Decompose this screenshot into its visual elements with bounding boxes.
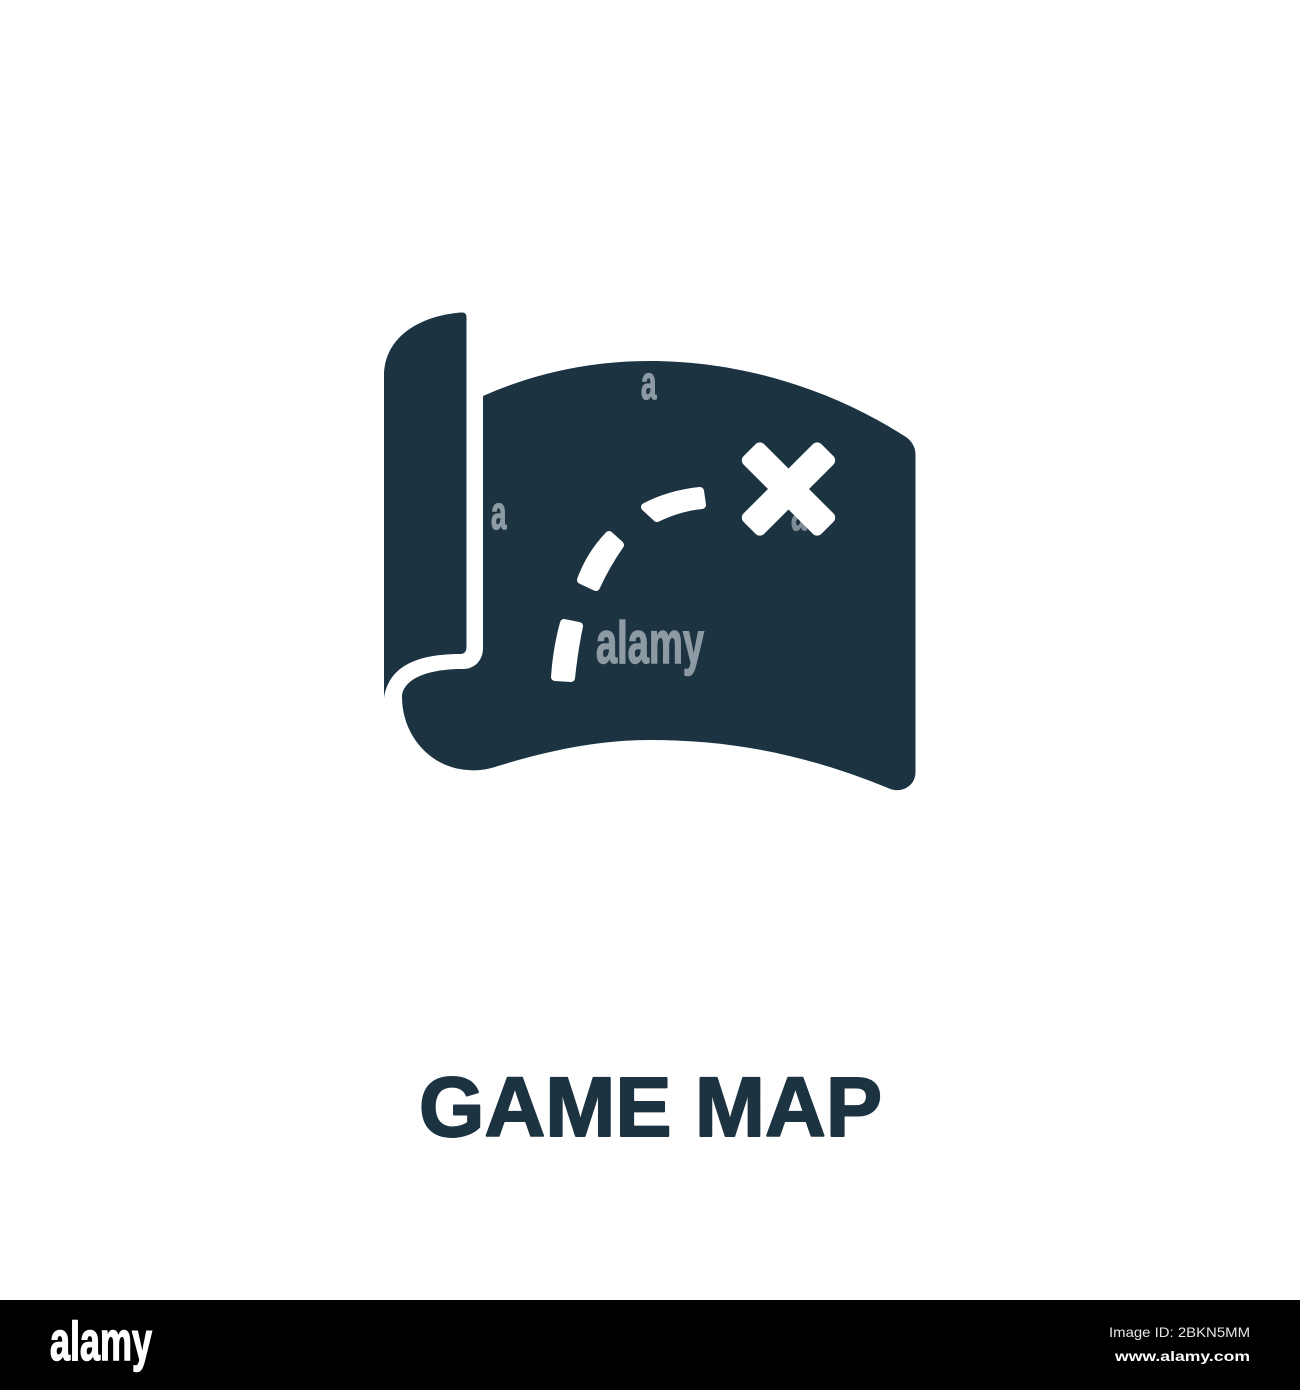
watermark: alamy centre: alamy xyxy=(596,610,704,676)
icon: game map xyxy=(384,312,916,790)
image id: Image ID: 2BKN5MM xyxy=(1109,1324,1250,1340)
website: www.alamy.com xyxy=(1114,1348,1250,1364)
footer bar xyxy=(0,1300,1300,1390)
title: GAME MAP xyxy=(419,1060,882,1154)
route dash near cross xyxy=(645,491,702,518)
map sheet xyxy=(402,361,916,790)
watermark: letter a behind cross: a xyxy=(791,487,807,540)
watermark: letter a left: a xyxy=(491,486,507,539)
footer logo: alamy xyxy=(50,1310,152,1372)
route dash lower xyxy=(555,623,579,678)
watermark: letter a top: a xyxy=(641,356,657,409)
route dash middle xyxy=(581,535,620,587)
map flap xyxy=(384,312,466,698)
destination cross xyxy=(739,440,838,538)
